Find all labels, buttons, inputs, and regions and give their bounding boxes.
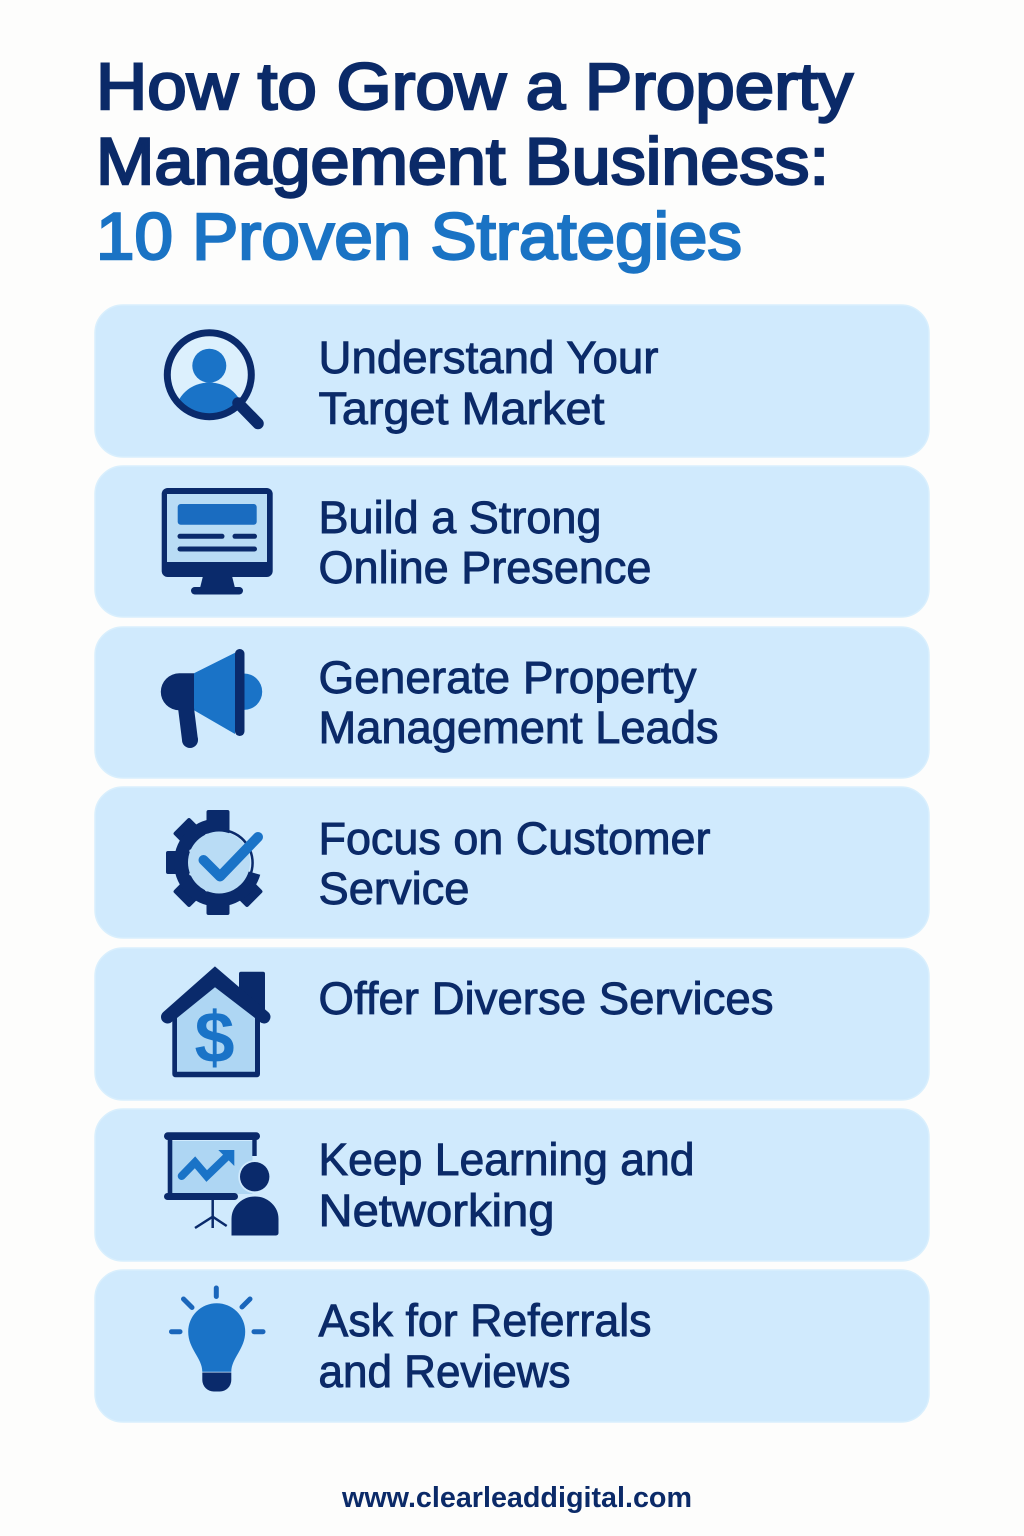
title [96,49,853,273]
text: build a strong online presence: Build a Strong [318,492,602,543]
text: understand your target market: Understand Your [318,332,659,383]
text: keep learning and networking: Networking [318,1185,554,1236]
icon: desktop monitor with web page [162,488,273,594]
text: understand your target market: Target Market [318,383,605,434]
icon: presenter with growth chart [164,1132,279,1236]
text: build a strong online presence: Online Presence [318,542,652,593]
text: generate property management leads: Management Leads [318,702,718,753]
dollar sign: $ [194,998,235,1078]
text: offer diverse services: Offer Diverse Services [318,973,774,1024]
icon: house with dollar sign [168,972,265,1078]
panel: offer diverse services [95,948,929,1100]
panel: build a strong online presence [95,466,929,617]
title: 10 Proven Strategies [96,199,742,273]
text: keep learning and networking: Keep Learning and [318,1134,694,1185]
text: focus on customer service: Focus on Customer [318,813,711,864]
panel: focus on customer service [95,787,929,938]
panel: ask for referrals and reviews [95,1270,929,1422]
icon: megaphone [161,649,262,748]
title: How to Grow a Property [96,49,853,123]
text: ask for referrals and reviews: Ask for Referrals [318,1295,652,1346]
icon: gear with check mark [166,810,263,915]
website footer: www.clearleaddigital.com [341,1482,692,1514]
icon: magnifying glass over person [167,333,258,446]
text: generate property management leads: Generate Property [318,652,697,703]
text: focus on customer service: Service [318,863,470,914]
icon: light bulb [172,1288,263,1392]
panel: keep learning and networking [95,1109,929,1261]
panel: understand your target market [95,305,929,457]
panel: generate property management leads [95,627,929,778]
title: Management Business: [96,124,829,198]
text: ask for referrals and reviews: and Reviews [318,1346,570,1397]
